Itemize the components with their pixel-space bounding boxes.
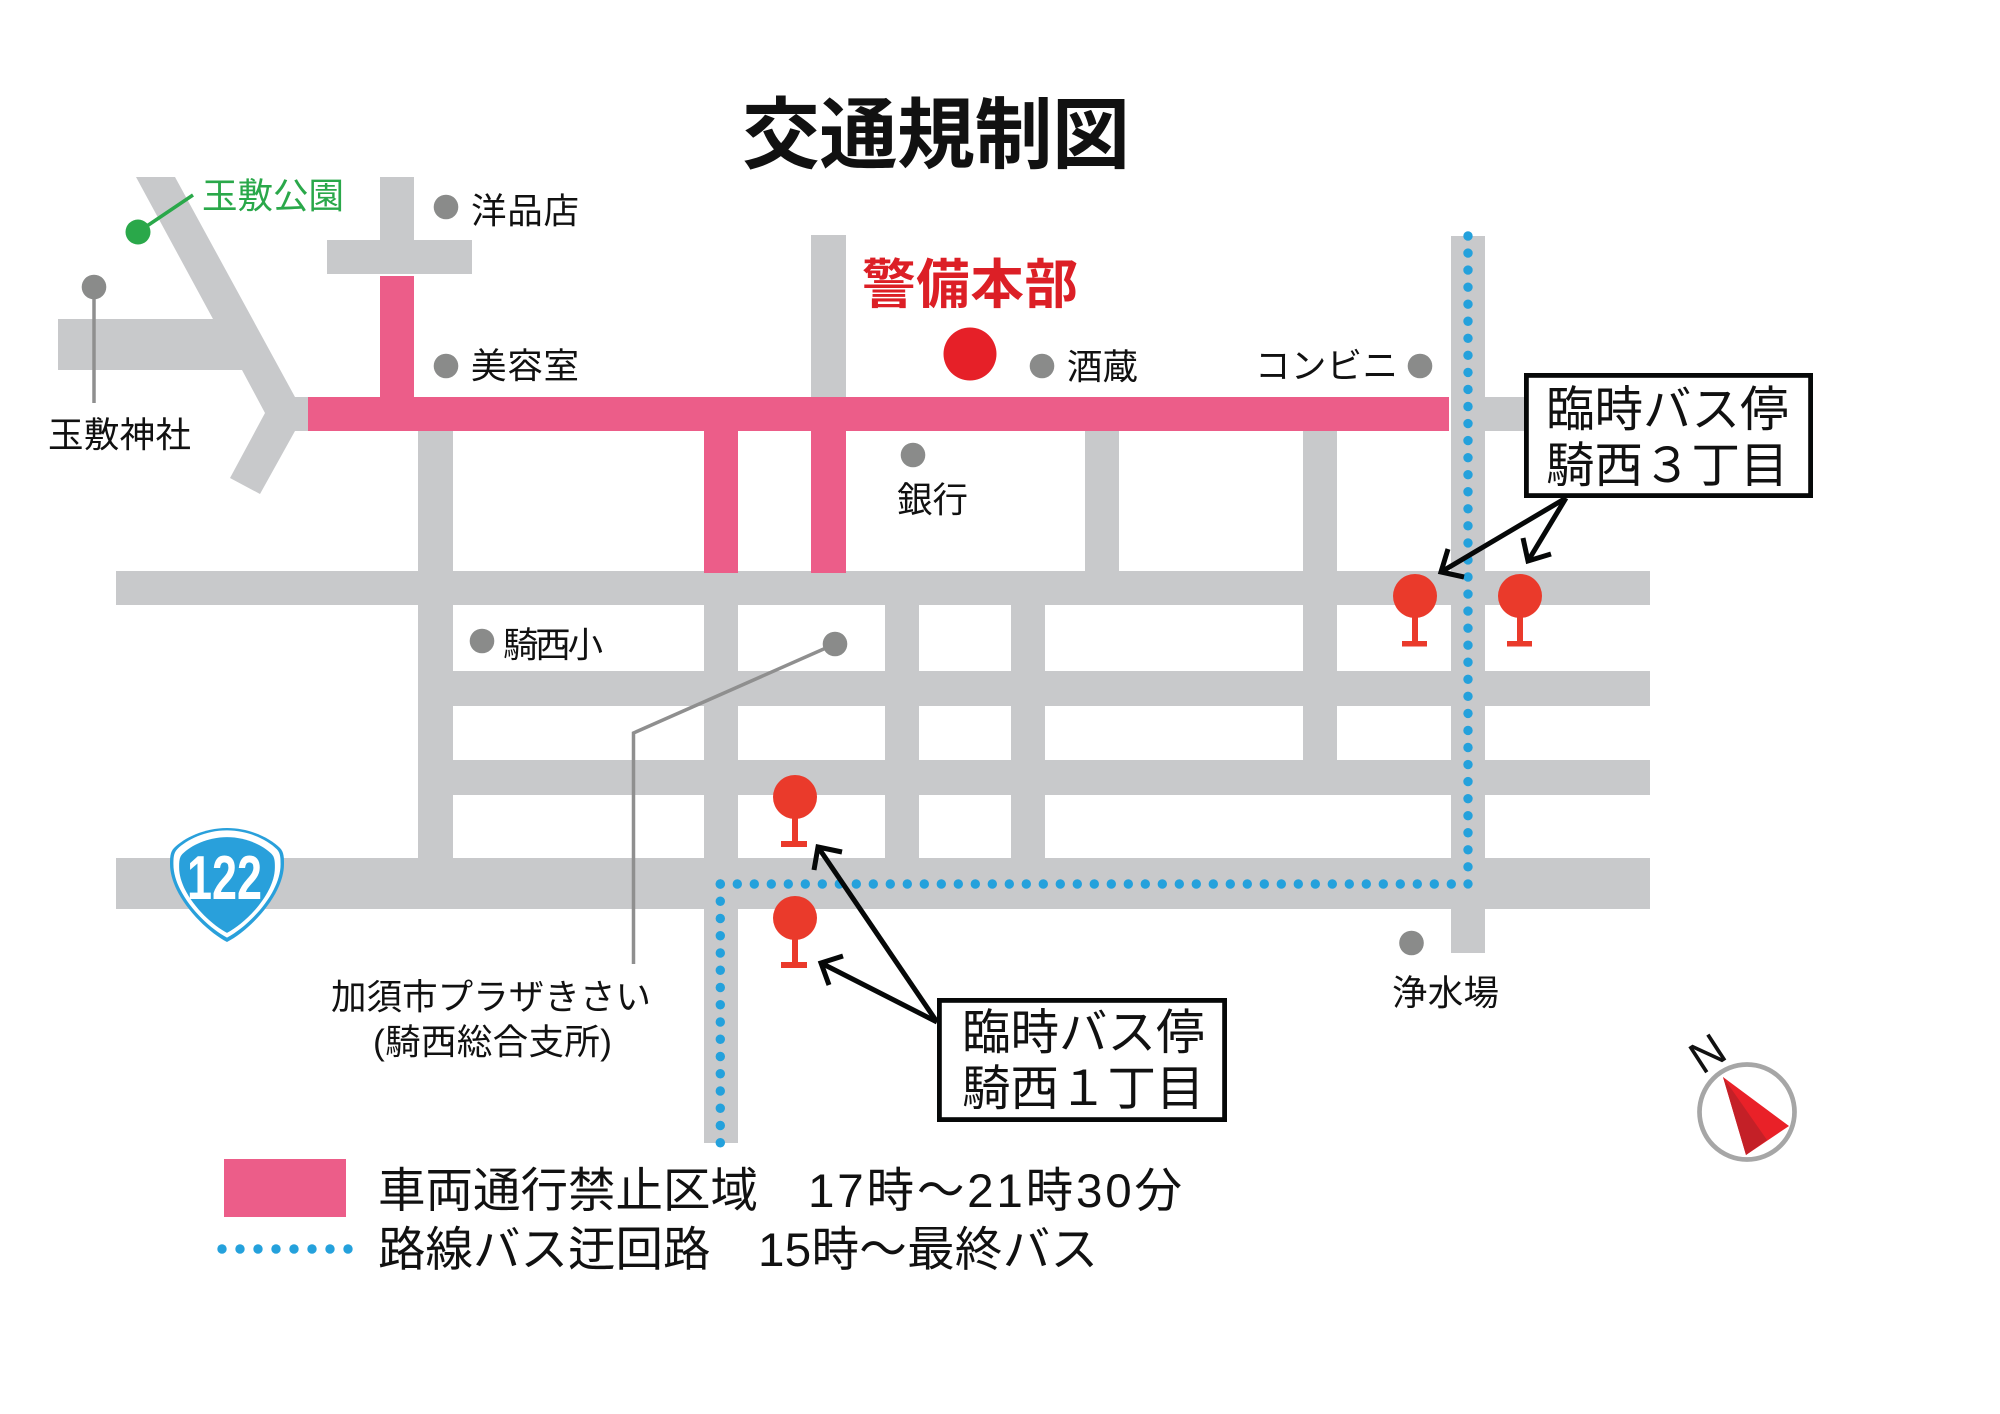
- legend: detour text: [378, 1224, 1098, 1277]
- route 122 shield: 122: [187, 844, 262, 913]
- callout: 騎西1丁目: 臨時バス停: [962, 1006, 1205, 1060]
- legend: detour text: 15時〜最終バス: [758, 1224, 1098, 1277]
- callout: 騎西1丁目: [939, 1000, 1225, 1120]
- landmark: 加須市プラザきさい: 加須市プラザきさい: [331, 977, 651, 1017]
- security headquarters: [862, 256, 1078, 380]
- vehicle-free zone roads (pink): [308, 276, 1449, 573]
- landmark: 美容室: 美容室: [471, 346, 579, 386]
- callout: 騎西1丁目: 騎西１丁目: [962, 1062, 1205, 1116]
- compass: [1680, 1023, 1794, 1160]
- legend: detour text: 路線バス迂回路: [378, 1224, 710, 1277]
- legend: no-vehicle zone text: 車両通行禁止区域: [378, 1165, 758, 1218]
- landmark: 玉敷神社: [48, 275, 191, 455]
- landmark: 騎西小: 騎西小: [503, 625, 603, 665]
- arrows to 騎西1丁目 stops: [814, 847, 937, 1022]
- callout: 騎西3丁目: 騎西３丁目: [1546, 439, 1789, 493]
- landmark: コンビニ: コンビニ: [1255, 346, 1398, 386]
- landmark: 銀行: 銀行: [897, 480, 968, 520]
- title: 交通規制図: [742, 91, 1130, 179]
- landmark: 玉敷公園: 玉敷公園: [202, 176, 344, 216]
- callout: 騎西3丁目: [1526, 375, 1811, 496]
- legend: detour dots: [217, 1244, 353, 1254]
- bus detour route (blue dots): [720, 236, 1468, 1143]
- compass: N: [1680, 1023, 1735, 1084]
- legend: no-vehicle zone swatch: [224, 1159, 346, 1217]
- landmark: 浄水場: [1392, 931, 1499, 1013]
- landmark: 洋品店: 洋品店: [471, 191, 579, 231]
- landmark: 酒蔵: [1030, 347, 1138, 387]
- legend: no-vehicle zone text: [378, 1165, 1182, 1218]
- legend: no-vehicle zone text: 17時〜21時30分: [808, 1165, 1182, 1218]
- landmark: 銀行: [897, 443, 968, 520]
- landmark: 加須市プラザきさい: (騎西総合支所): [373, 1022, 612, 1062]
- road network (gray): [58, 177, 1650, 1143]
- security headquarters: 警備本部: [862, 256, 1078, 315]
- bus stop icons: [773, 574, 1542, 968]
- legend: [217, 1159, 1182, 1277]
- landmark: 浄水場: 浄水場: [1392, 973, 1499, 1013]
- arrows to 騎西3丁目 stops: [1441, 498, 1566, 577]
- route 122 shield: [170, 828, 284, 942]
- landmark: 酒蔵: 酒蔵: [1067, 347, 1138, 387]
- landmark: 加須市プラザきさい: [331, 632, 847, 1062]
- landmark: 玉敷公園: [126, 176, 344, 244]
- landmark: 玉敷神社: 玉敷神社: [48, 415, 191, 455]
- callout: 騎西3丁目: 臨時バス停: [1546, 383, 1789, 437]
